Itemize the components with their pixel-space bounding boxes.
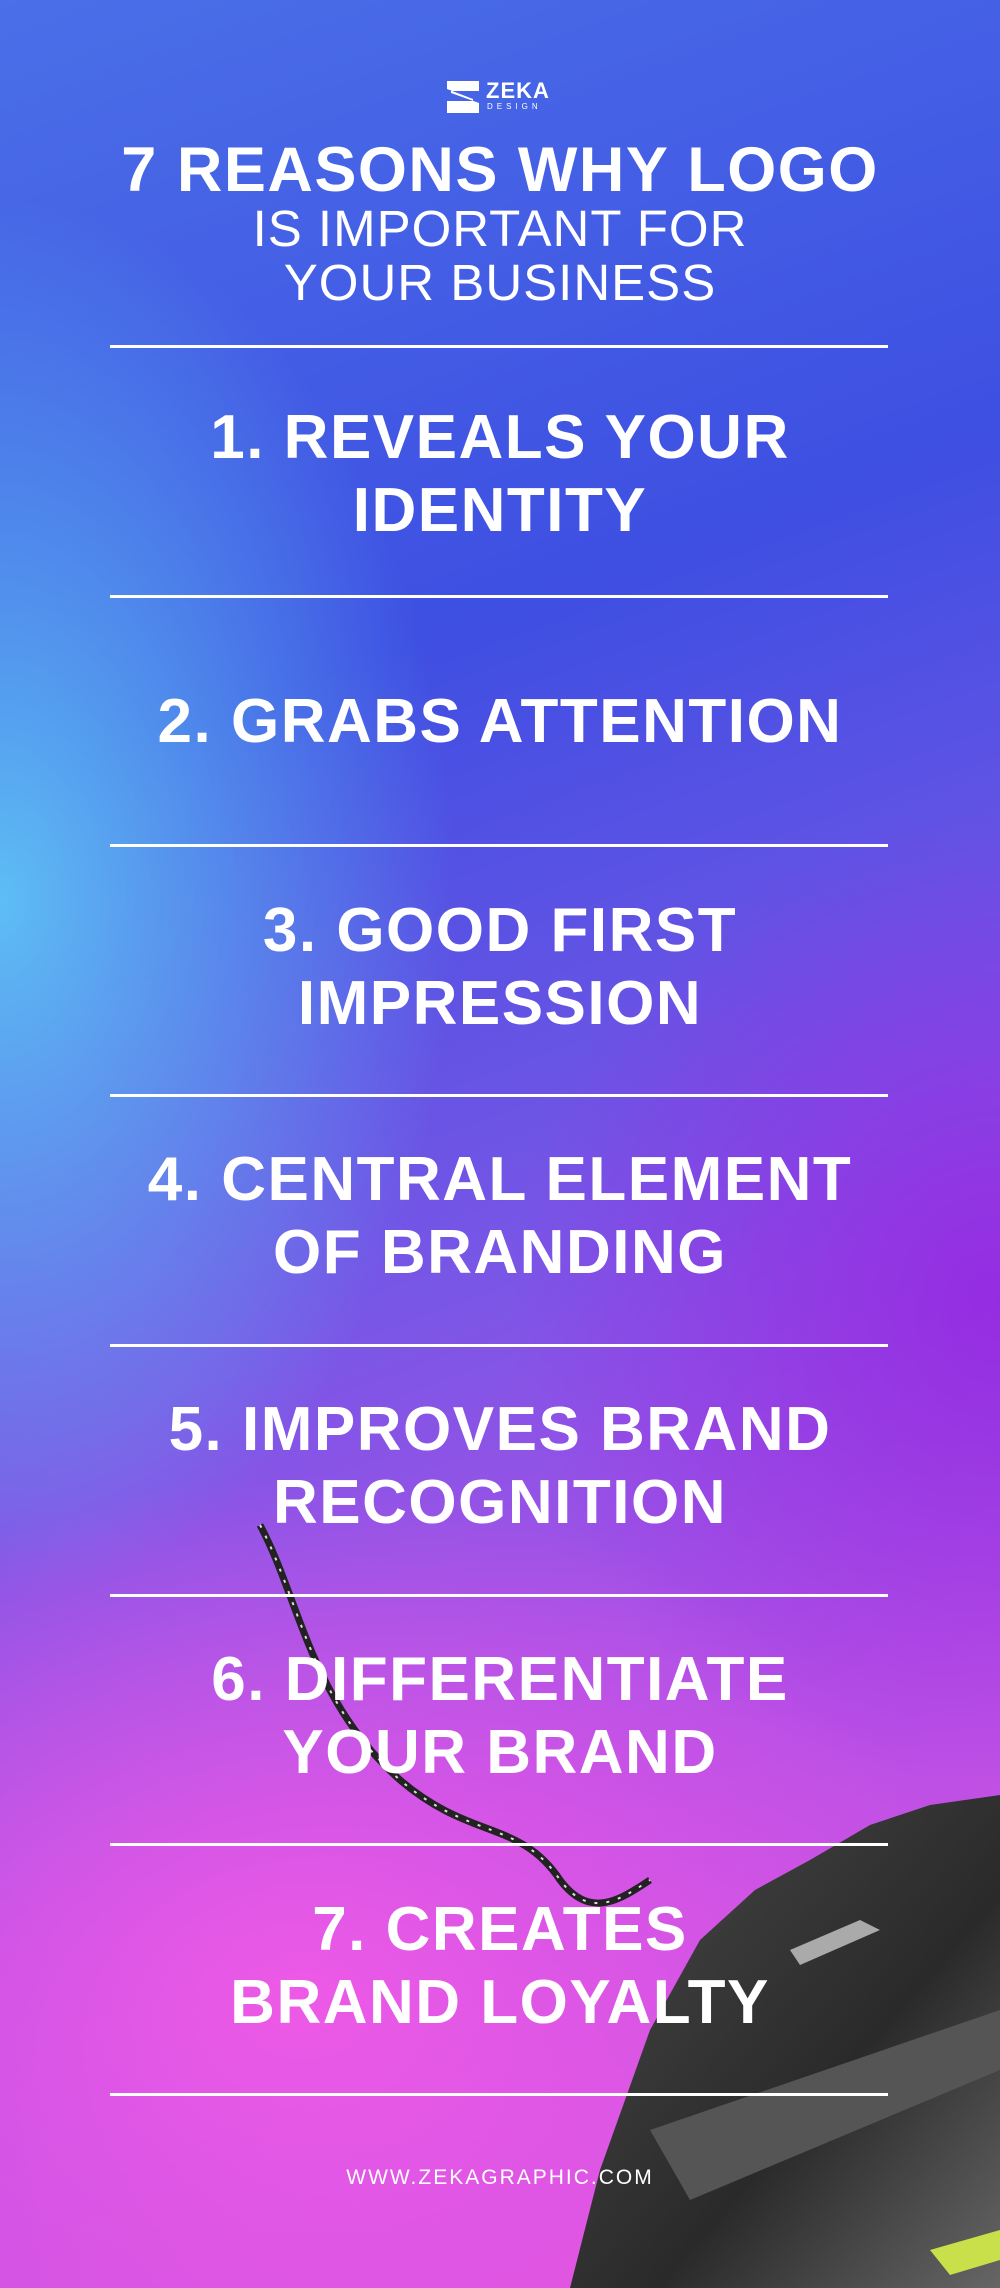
title: YOUR BUSINESS (284, 254, 716, 311)
item 7 (230, 1895, 770, 2037)
item 1: IDENTITY (353, 476, 647, 545)
title: 7 REASONS WHY LOGO (121, 135, 879, 205)
footer url: WWW.ZEKAGRAPHIC.COM (346, 2166, 654, 2189)
item 5: RECOGNITION (273, 1468, 727, 1537)
logo: ZEKA (486, 78, 550, 103)
title: IS IMPORTANT FOR (253, 200, 747, 257)
item 3: IMPRESSION (298, 969, 702, 1038)
title (121, 135, 879, 311)
item 4 (148, 1145, 852, 1287)
item 6 (211, 1645, 789, 1787)
item 6: YOUR BRAND (282, 1718, 718, 1787)
item 1 (210, 403, 790, 545)
item 1: 1. REVEALS YOUR (210, 403, 790, 472)
item 5 (169, 1395, 831, 1537)
item 6: 6. DIFFERENTIATE (211, 1645, 789, 1714)
logo: DESIGN (487, 102, 542, 111)
item 7: BRAND LOYALTY (230, 1968, 770, 2037)
item 4: 4. CENTRAL ELEMENT (148, 1145, 852, 1214)
item 3: 3. GOOD FIRST (263, 896, 737, 965)
item 7: 7. CREATES (312, 1895, 688, 1964)
item 3 (263, 896, 737, 1038)
item 5: 5. IMPROVES BRAND (169, 1395, 831, 1464)
logo (447, 78, 550, 113)
item 2: 2. GRABS ATTENTION (158, 687, 842, 756)
item 4: OF BRANDING (273, 1218, 727, 1287)
